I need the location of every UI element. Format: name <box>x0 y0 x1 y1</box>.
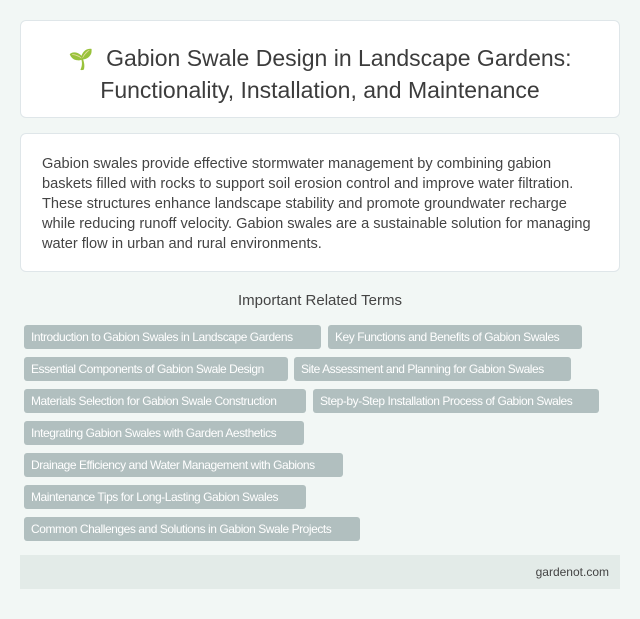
tag 9 <box>24 485 306 509</box>
title: 🌱 Gabion Swale Design in Landscape Gardens: <box>68 45 572 71</box>
tag 5: Materials Selection for Gabion Swale Construction <box>31 394 276 408</box>
tag 3 <box>24 357 288 381</box>
tag 4 <box>294 357 571 381</box>
tag 6 <box>313 389 599 413</box>
tag 7 <box>24 421 304 445</box>
tag 8: Drainage Efficiency and Water Management with Gabions <box>31 458 315 472</box>
tag 10: Common Challenges and Solutions in Gabion Swale Projects <box>31 522 331 536</box>
tag 1 <box>24 325 321 349</box>
footer <box>20 555 620 589</box>
tag 2: Key Functions and Benefits of Gabion Swales <box>335 330 559 344</box>
tag 4: Site Assessment and Planning for Gabion Swales <box>301 362 544 376</box>
title: Functionality, Installation, and Maintenance <box>100 77 540 103</box>
footer text: gardenot.com <box>536 565 609 579</box>
tag 9: Maintenance Tips for Long-Lasting Gabion Swales <box>31 490 278 504</box>
heading: related terms: Important Related Terms <box>238 292 402 309</box>
tag 5 <box>24 389 306 413</box>
header panel <box>20 20 620 118</box>
tag 7: Integrating Gabion Swales with Garden Aesthetics <box>31 426 276 440</box>
tag 6: Step-by-Step Installation Process of Gabion Swales <box>320 394 572 408</box>
description text: Gabion swales provide effective stormwater management by combining gabion baskets filled with rocks to support soil erosion control and improve water filtration. These structures enhance landscape stability and promote groundwater recharge while reducing runoff velocity. Gabion swales are a sustainable solution for managing water flow in urban and rural environments. <box>42 156 591 252</box>
tag 1: Introduction to Gabion Swales in Landscape Gardens <box>31 330 293 344</box>
title <box>68 45 572 103</box>
tag 2 <box>328 325 582 349</box>
tag 3: Essential Components of Gabion Swale Design <box>31 362 264 376</box>
tag 10 <box>24 517 360 541</box>
description panel <box>20 133 620 272</box>
tag 8 <box>24 453 343 477</box>
